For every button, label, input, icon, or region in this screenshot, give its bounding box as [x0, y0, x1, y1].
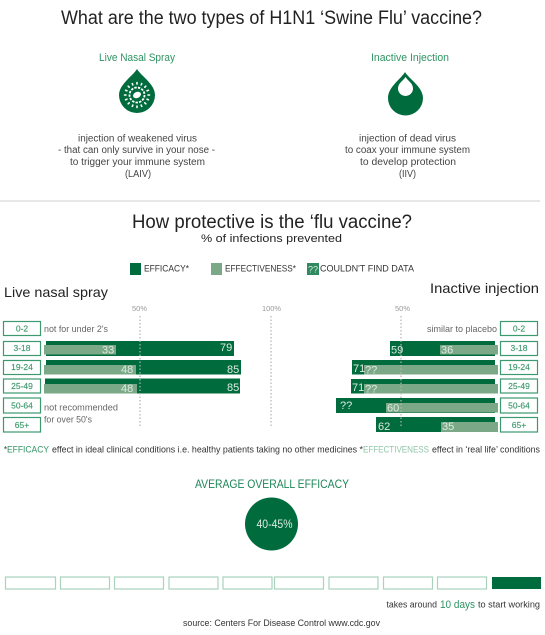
heading: live nasal spray: Live Nasal Spray: [99, 52, 175, 64]
legend: COULDN'T FIND DATA: [320, 264, 414, 274]
circle: 40-45%: [245, 498, 298, 550]
footnote: [4, 444, 540, 456]
footnote: EFFECTIVENESS: [363, 444, 429, 456]
description: inactive injection: to develop protection: [360, 157, 456, 168]
panel: live nasal spray: [58, 52, 215, 180]
description: live nasal spray: [58, 134, 215, 180]
icon: drop with hollow droplet: [388, 72, 423, 116]
age labels: left: [4, 322, 40, 432]
bar: 50-64: [336, 398, 498, 414]
legend: EFFECTIVENESS*: [225, 264, 296, 274]
axis labels: 100%: [262, 306, 281, 313]
footnote: *: [4, 444, 7, 456]
title: What are the two types of H1N1 ‘Swine Flu’ vaccine?: [61, 8, 482, 29]
bar: 65+: [376, 417, 498, 433]
heading: how protective: How protective is the ‘flu vaccine?: [132, 212, 412, 233]
note: not recommended for over 50's: not recommended: [44, 402, 118, 414]
bar: 19-24: 85: [227, 364, 239, 376]
bar: 19-24: [352, 360, 498, 376]
bar: 19-24: 48: [121, 364, 133, 376]
subheading: % of infections prevented: [201, 233, 342, 245]
age labels: right: [500, 322, 538, 432]
age labels: left: 50-64: [11, 400, 33, 410]
legend: EFFICACY*: [144, 264, 189, 274]
circle: 40-45%: 40-45%: [256, 519, 292, 531]
age labels: left: 25-49: [11, 381, 33, 391]
caption: takes around 10 days: 10 days: [440, 599, 475, 611]
description: inactive injection: injection of dead virus: [359, 134, 456, 144]
bar: 50-64: ??: [340, 400, 352, 412]
bar: 3-18: 59: [391, 344, 403, 356]
bar: 65+: 62: [378, 421, 390, 433]
description: live nasal spray: injection of weakened virus: [78, 134, 197, 144]
description: inactive injection: (IIV): [399, 169, 416, 180]
age labels: right: 3-18: [510, 343, 528, 353]
bar: 3-18: 33: [102, 344, 114, 356]
bar: 19-24: [44, 360, 241, 376]
heading: live nasal spray chart: Live nasal spray: [4, 284, 108, 300]
axis labels: 50%: [132, 306, 147, 313]
bar: 3-18: 36: [441, 344, 453, 356]
bar: 25-49: 71: [352, 382, 364, 394]
footnote: effect in ideal clinical conditions i.e. healthy patients taking no other medicines *: [52, 444, 363, 456]
age labels: left: 65+: [15, 420, 29, 430]
footnote: EFFICACY: [7, 444, 50, 456]
description: inactive injection: to coax your immune system: [345, 145, 470, 156]
description: inactive injection: [345, 134, 470, 180]
legend: ??: [308, 264, 318, 274]
chart: live nasal spray bars: [44, 341, 241, 395]
age labels: right: 19-24: [508, 362, 530, 372]
bar: 3-18: 79: [220, 342, 232, 354]
bar: 25-49: ??: [365, 384, 377, 396]
age labels: right: 25-49: [508, 381, 530, 391]
icon: drop with virus: [119, 69, 155, 113]
axis labels: 50%: [395, 306, 410, 313]
bar: 19-24: ??: [365, 364, 377, 376]
age labels: right: 50-64: [508, 400, 530, 410]
description: live nasal spray: - that can only survive in your nose -: [58, 145, 215, 156]
bar: 19-24: 71: [353, 363, 365, 375]
bar: 3-18: [44, 341, 234, 356]
age labels: left: 3-18: [13, 343, 31, 353]
legend: [130, 263, 414, 275]
bar: 25-49: [44, 378, 240, 395]
note: not recommended for over 50's: [44, 402, 118, 426]
bar: 50-64: 60: [387, 402, 399, 414]
bar: 3-18: [390, 341, 498, 356]
bar: 65+: 35: [442, 421, 454, 433]
caption: takes around 10 days: [386, 599, 540, 611]
heading: average overall efficacy: AVERAGE OVERALL EFFICACY: [195, 479, 349, 491]
note: similar to placebo: similar to placebo: [427, 324, 497, 335]
bar: 25-49: 48: [121, 383, 133, 395]
description: live nasal spray: (LAIV): [125, 169, 151, 180]
bar: 25-49: [351, 379, 498, 396]
caption: takes around 10 days: to start working: [478, 600, 540, 610]
footnote: effect in ‘real life’ conditions: [432, 444, 540, 456]
chart: inactive injection bars: [336, 341, 498, 433]
source: source: Centers For Disease Control www.cdc.gov: [183, 618, 380, 628]
axis labels: [132, 306, 410, 313]
age labels: left: 19-24: [11, 362, 33, 372]
timeline: 10 days: [6, 577, 541, 589]
note: not recommended for over 50's: for over 50's: [44, 414, 92, 426]
caption: takes around 10 days: takes around: [386, 600, 437, 610]
bar: 25-49: 85: [227, 382, 239, 394]
description: live nasal spray: to trigger your immune system: [70, 157, 205, 168]
age labels: right: 65+: [512, 420, 526, 430]
note: not for under 2's: not for under 2's: [44, 324, 108, 335]
age labels: right: 0-2: [513, 324, 525, 334]
age labels: left: 0-2: [16, 324, 28, 334]
panel: inactive injection: [345, 52, 470, 180]
heading: inactive injection: Inactive Injection: [371, 52, 449, 64]
heading: inactive injection chart: Inactive injection: [430, 280, 539, 296]
